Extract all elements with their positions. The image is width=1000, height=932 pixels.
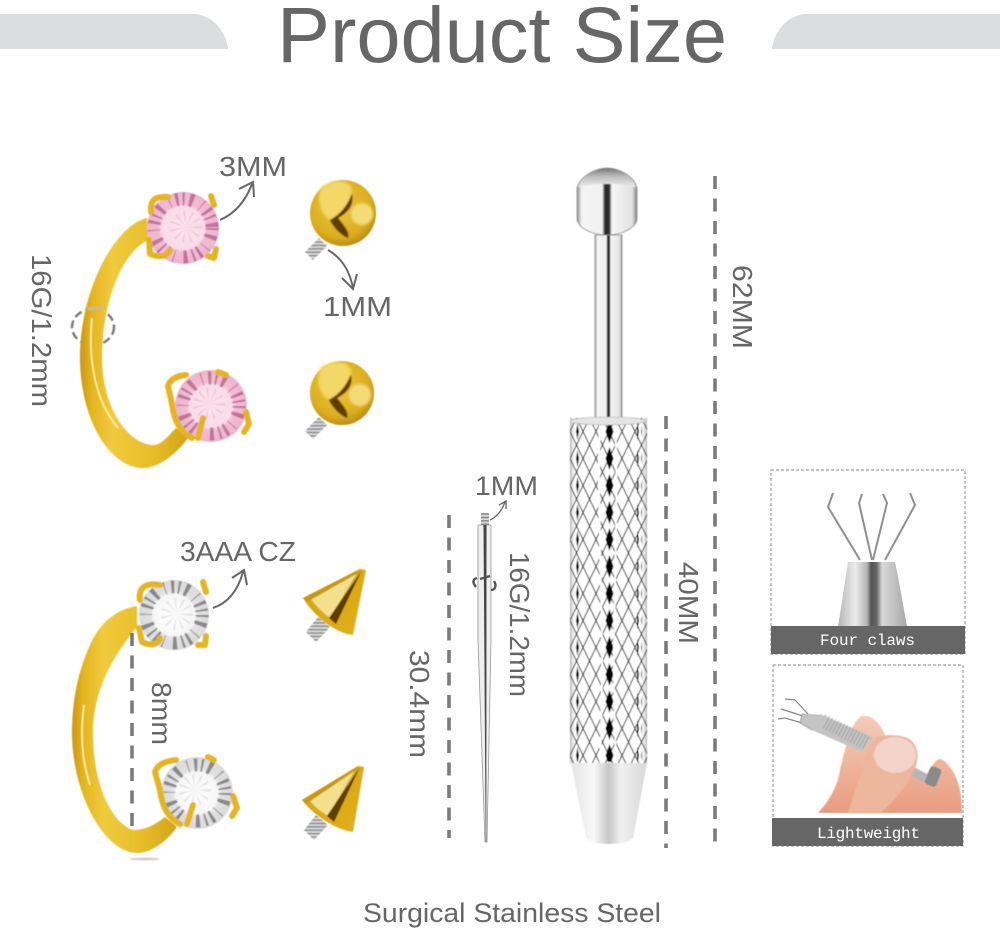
label: taper gauge: 16G/1.2mm bbox=[504, 552, 535, 697]
ring highlight bbox=[82, 705, 90, 785]
panel: lightweight bbox=[772, 665, 963, 846]
label: 8mm: 8mm bbox=[146, 682, 177, 745]
screw thread bbox=[305, 417, 327, 439]
footer text: Surgical Stainless Steel bbox=[363, 898, 661, 928]
label: 1MM taper: 1MM bbox=[475, 471, 538, 501]
gold spike top bbox=[303, 569, 366, 642]
label: 30.4mm: 30.4mm bbox=[404, 650, 435, 758]
banner: right bbox=[772, 14, 1000, 49]
tool in hand bbox=[800, 714, 942, 788]
caption: Lightweight bbox=[817, 825, 920, 843]
banner: left bbox=[0, 14, 228, 49]
dashed line: 40MM bbox=[664, 416, 668, 848]
finger behind bbox=[818, 716, 962, 813]
tool cap bbox=[578, 168, 636, 187]
dashed line: 62MM bbox=[713, 176, 717, 844]
label: 1MM stud: 1MM bbox=[323, 291, 392, 322]
ring body bbox=[80, 218, 188, 468]
label: ring gauge: 16G/1.2mm bbox=[26, 254, 57, 407]
gold ball bottom bbox=[305, 361, 374, 439]
label: 40MM: 40MM bbox=[673, 562, 704, 644]
claw prongs bbox=[828, 493, 915, 560]
screw thread bbox=[306, 617, 330, 642]
caption: Four claws bbox=[820, 632, 915, 650]
arrow: 1MM bbox=[328, 250, 357, 289]
label: 3MM: 3MM bbox=[219, 151, 287, 182]
dashed line: 30.4mm bbox=[447, 515, 451, 838]
label: 3AAA CZ: 3AAA CZ bbox=[180, 536, 296, 567]
ring body bbox=[72, 606, 177, 853]
dashed line: 8mm bbox=[130, 633, 134, 830]
thumb bbox=[848, 735, 918, 813]
taper thread bbox=[481, 513, 489, 525]
twist marker bbox=[473, 576, 495, 590]
panel: four claws bbox=[771, 470, 965, 654]
dashed ring marker bbox=[72, 309, 114, 345]
tool shaft bbox=[595, 235, 622, 418]
gem: bottom white bbox=[155, 757, 237, 829]
claw base bbox=[838, 562, 907, 626]
gem: top pink bbox=[147, 192, 219, 264]
gold ball top bbox=[305, 180, 376, 260]
smudge bbox=[130, 858, 160, 860]
label: 62MM: 62MM bbox=[727, 265, 758, 349]
arrow: 3AAA CZ bbox=[213, 570, 247, 608]
gold spike bottom bbox=[302, 766, 364, 840]
ring highlight bbox=[91, 318, 118, 428]
four-claw tool bbox=[570, 168, 647, 844]
claws small bbox=[778, 699, 808, 723]
ring seam bbox=[88, 308, 103, 309]
screw thread bbox=[304, 815, 328, 840]
gem: bottom pink bbox=[168, 370, 249, 442]
gem: top white bbox=[139, 580, 209, 650]
insertion taper bbox=[473, 513, 495, 842]
thumbnail bbox=[874, 737, 916, 773]
screw thread bbox=[305, 238, 327, 260]
arrow: 3MM bbox=[220, 182, 254, 220]
tapered end bbox=[571, 763, 647, 844]
white curved barbell bbox=[72, 580, 237, 860]
tool head bbox=[577, 168, 637, 235]
pink curved barbell bbox=[72, 192, 249, 468]
arrow: taper thread bbox=[490, 501, 506, 520]
knurled barrel bbox=[570, 417, 647, 763]
caption bar bbox=[772, 818, 963, 846]
caption bar bbox=[771, 626, 965, 654]
